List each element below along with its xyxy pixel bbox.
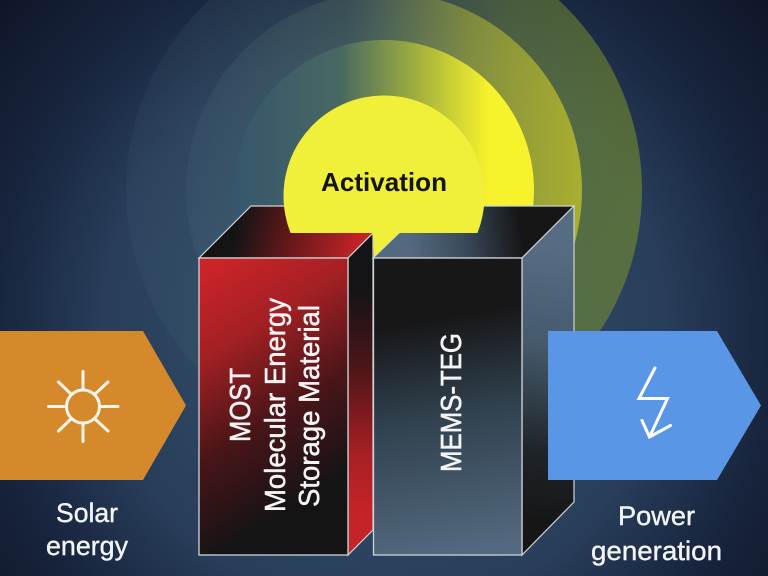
label: Power generation (591, 501, 722, 566)
activation circle (284, 96, 484, 257)
block: MOST molecular energy storage material (199, 206, 373, 555)
arrow panel: solar energy (0, 331, 186, 480)
arrow panel: power generation (548, 331, 761, 480)
heading: Activation: Activation (321, 167, 447, 197)
label: Power generation: Power (618, 501, 695, 531)
label: Molecular Energy: Molecular Energy (260, 298, 292, 512)
label: MEMS-TEG: MEMS-TEG (436, 333, 468, 472)
label: MOST: MOST (225, 368, 257, 442)
label: Power generation: generation (591, 536, 722, 566)
label: Storage Material: Storage Material (294, 305, 326, 507)
label: Solar energy (46, 498, 128, 561)
concentric activation rings (126, 0, 642, 448)
icon: sun (48, 372, 118, 442)
block: MEMS-TEG (373, 206, 574, 555)
icon: lightning bolt arrow (639, 368, 670, 437)
label: Solar energy: energy (46, 531, 128, 561)
label: Solar energy: Solar (56, 498, 118, 528)
